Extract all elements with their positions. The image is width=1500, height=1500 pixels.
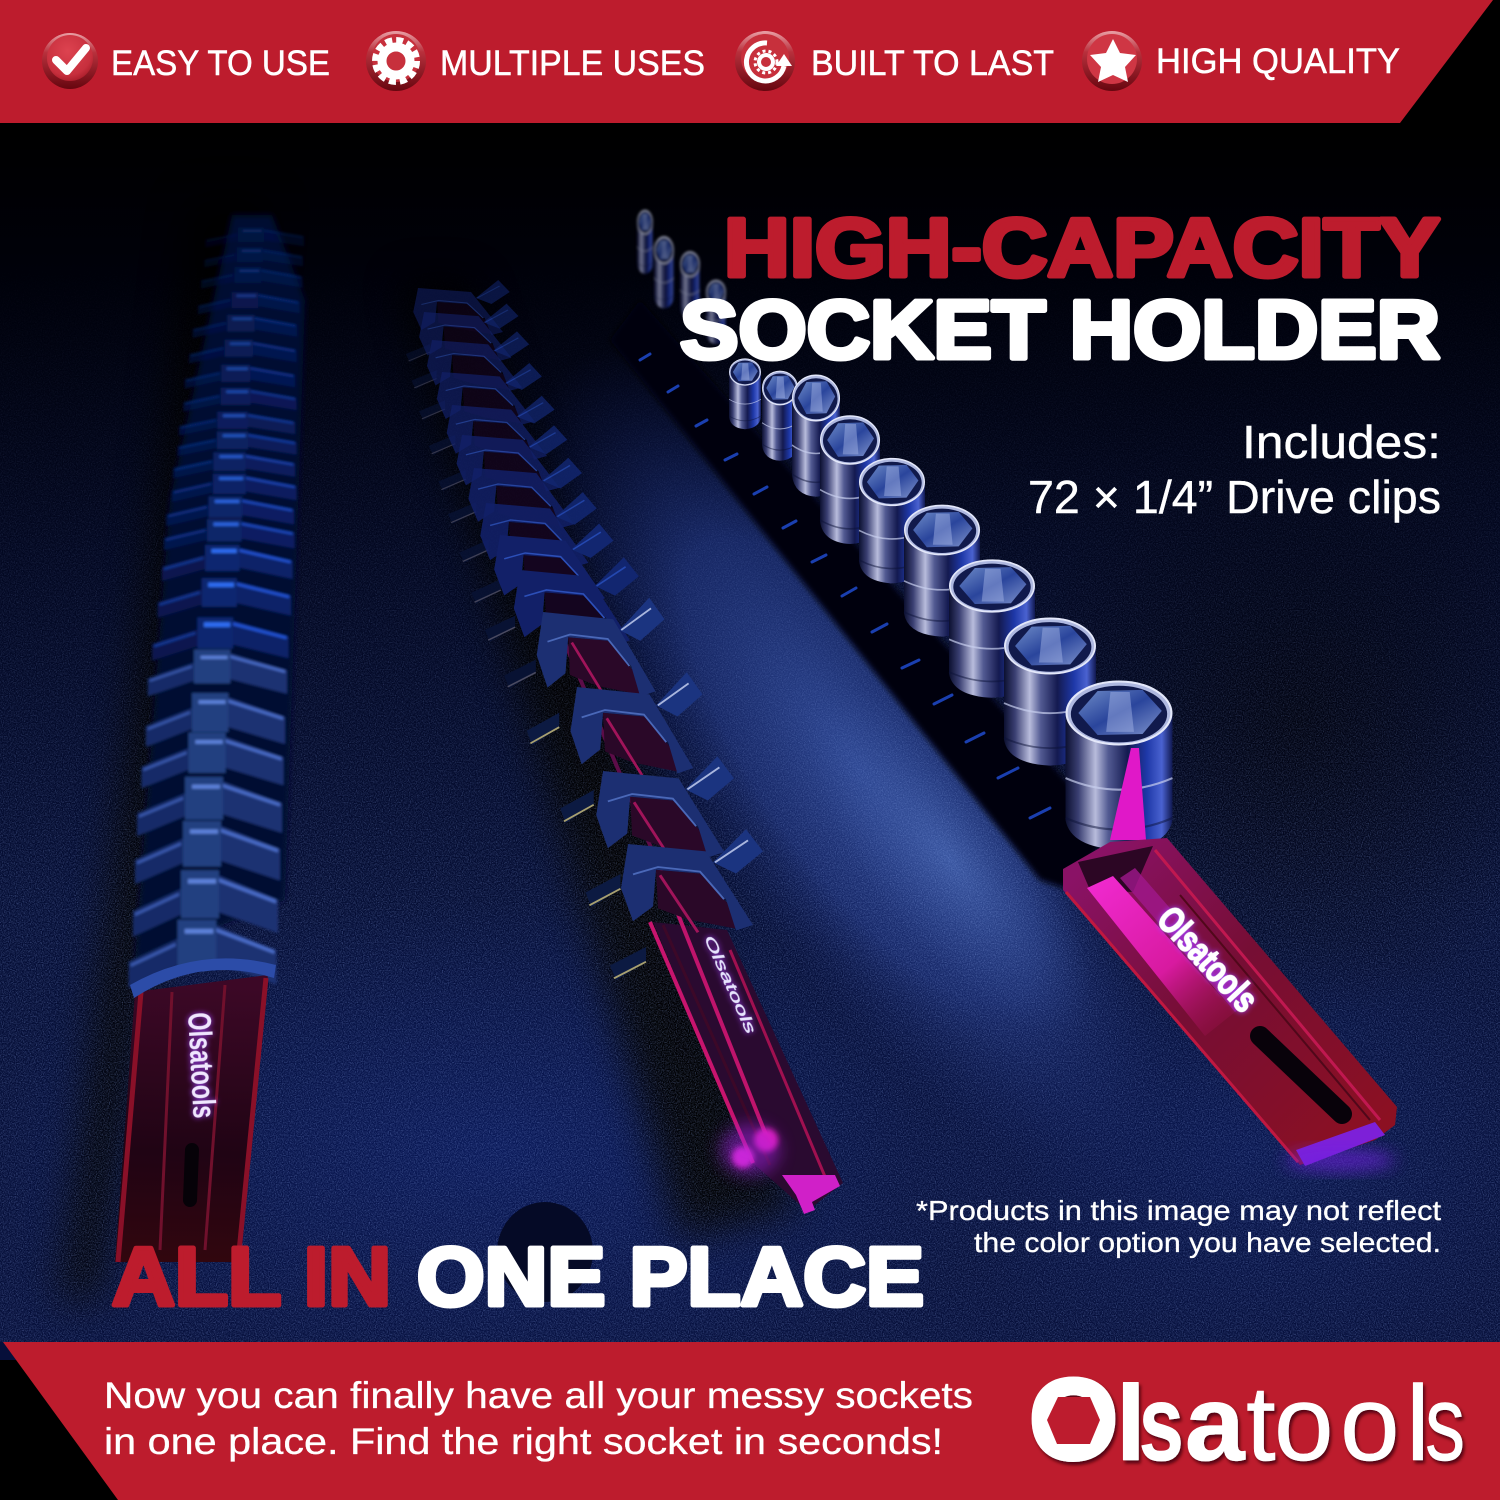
- includes text: [1028, 416, 1441, 523]
- Olsatools logo: O: [1030, 1357, 1117, 1482]
- rail 3: red end plate with slot: [1063, 838, 1397, 1172]
- disclaimer: the color option you have selected.: [974, 1227, 1441, 1258]
- rail 1: red end plate with logo: [115, 958, 276, 1262]
- photo background: dark blue fabric: [0, 247, 1500, 1360]
- Olsatools logo: l: [1116, 1363, 1146, 1483]
- top banner: [0, 0, 1493, 123]
- bottom banner: [3, 1342, 1500, 1500]
- Olsatools logo: tool: [1246, 1363, 1430, 1483]
- plate logo: Olsatools: [1149, 898, 1266, 1020]
- includes text: Includes:: [1242, 416, 1441, 468]
- rail 2: plate and rods: [552, 612, 843, 1214]
- slogan: all in one place: ONE PLACE: [417, 1230, 924, 1323]
- Olsatools logo: a: [1185, 1363, 1246, 1483]
- badge: high quality: HIGH QUALITY: [1156, 42, 1400, 81]
- Olsatools logo: [1030, 1357, 1465, 1484]
- rail 3: chrome sockets: [637, 210, 1172, 850]
- badge: high quality: [1082, 31, 1400, 91]
- badge: multiple uses: MULTIPLE USES: [440, 44, 705, 83]
- disclaimer: [916, 1195, 1441, 1258]
- title: HIGH-CAPACITY: [724, 201, 1440, 294]
- badge: built to last: [735, 31, 1054, 91]
- bottom description: [104, 1375, 973, 1462]
- rail 1: blue clip column: [129, 215, 305, 988]
- badge: multiple uses: [366, 31, 705, 91]
- Olsatools logo: s: [1425, 1364, 1465, 1484]
- slogan: all in one place: ALL IN: [112, 1230, 391, 1323]
- includes text: 72 × 1/4” Drive clips: [1028, 471, 1441, 523]
- bottom description: Now you can finally have all your messy sockets: [104, 1375, 973, 1416]
- badge: built to last: BUILT TO LAST: [811, 44, 1054, 83]
- rail 3: black clip strip: [610, 300, 1110, 890]
- slogan: all in one place: [112, 1230, 924, 1323]
- round knob near bottom centre: [497, 1202, 593, 1302]
- title: [680, 201, 1440, 376]
- Olsatools logo: s: [1139, 1364, 1184, 1484]
- rail 2 faint logo: Olsatools: [700, 933, 759, 1037]
- disclaimer: *Products in this image may not reflect: [916, 1195, 1441, 1226]
- rail 2: clips: [406, 280, 763, 980]
- bottom description: in one place. Find the right socket in seconds!: [104, 1421, 943, 1462]
- badge: easy to use: EASY TO USE: [111, 44, 330, 83]
- title: SOCKET HOLDER: [680, 283, 1440, 376]
- badge: easy to use: [42, 33, 330, 89]
- rail 1: red end plate with logo: Olsatools: [181, 1011, 223, 1119]
